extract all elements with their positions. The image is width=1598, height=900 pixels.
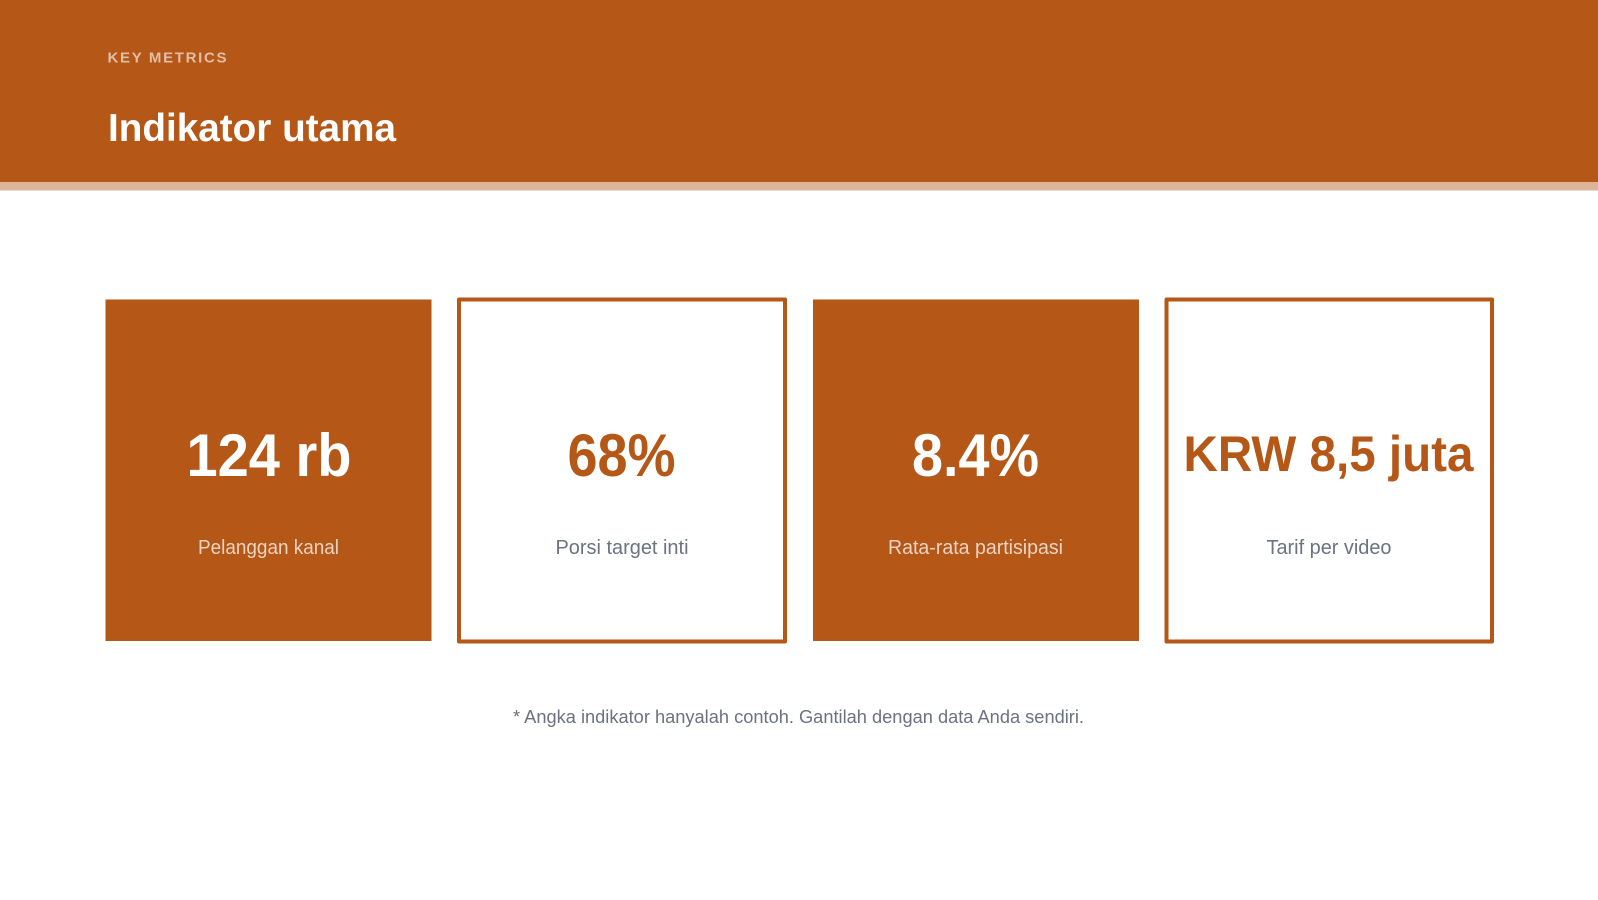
label: Porsi target inti: [556, 537, 688, 559]
value: 8.4%: [912, 422, 1039, 489]
value: 124 rb: [186, 422, 352, 489]
metric card: Pelanggan kanal: [106, 300, 432, 641]
value: 68%: [568, 422, 676, 489]
value: KRW 8,5 juta: [1184, 426, 1475, 482]
header banner: [0, 0, 1598, 190]
eyebrow label: KEY METRICS: [108, 50, 226, 66]
metric card: Porsi target inti: [459, 300, 785, 642]
label: Pelanggan kanal: [198, 537, 339, 559]
metric card: Tarif per video: [1166, 300, 1492, 642]
label: Tarif per video: [1266, 537, 1392, 559]
metric card: Rata-rata partisipasi: [813, 300, 1139, 641]
title: Indikator utama: [108, 107, 396, 150]
label: Rata-rata partisipasi: [888, 537, 1063, 559]
footnote: * Angka indikator hanyalah contoh. Gantilah dengan data Anda sendiri.: [513, 706, 1084, 727]
